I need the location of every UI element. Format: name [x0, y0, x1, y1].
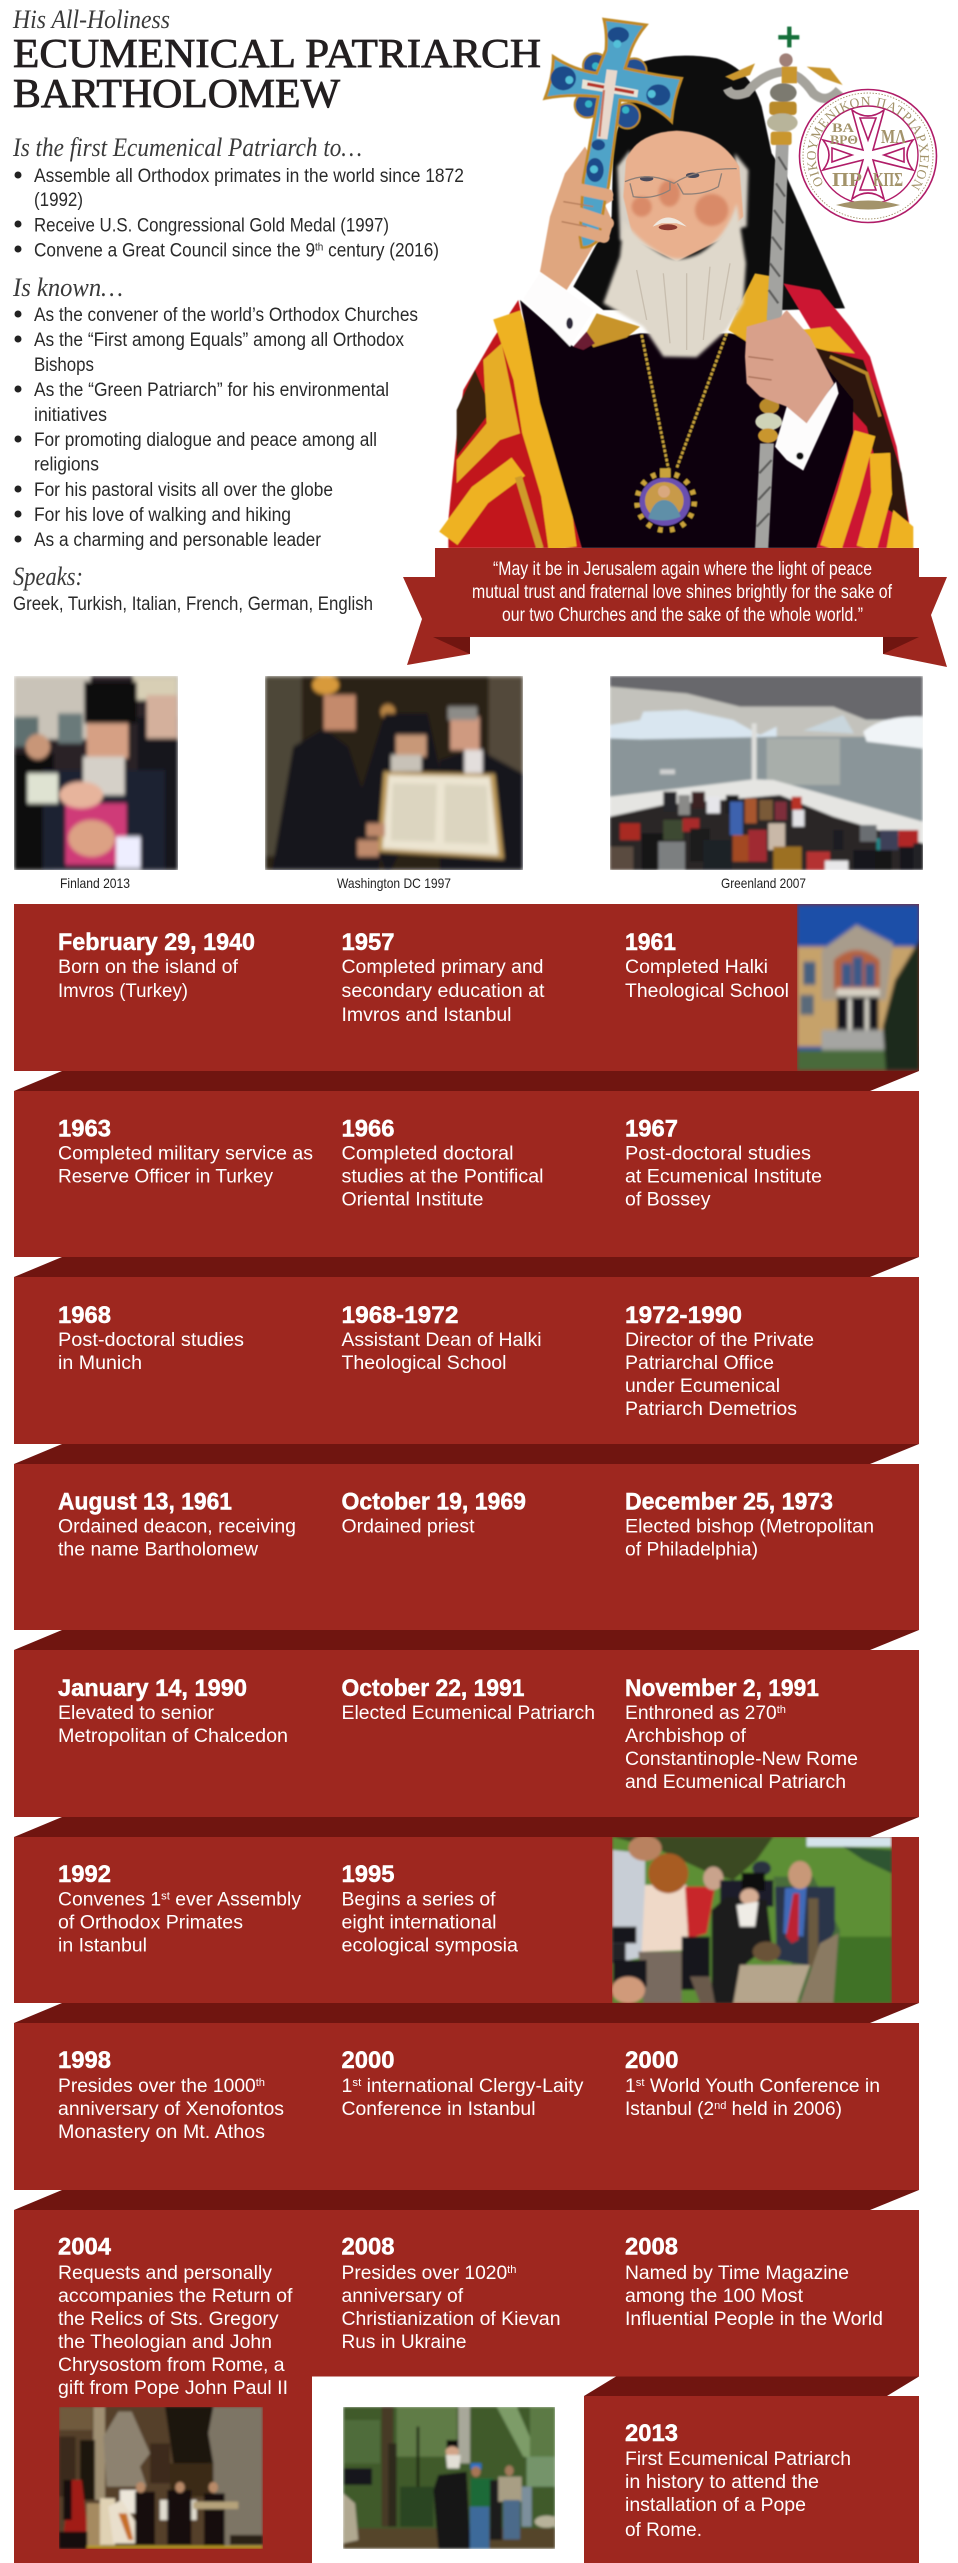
entry: 2004: Requests and personally	[58, 2263, 273, 2284]
timeline band 4	[14, 1464, 919, 1630]
right hand	[745, 310, 834, 423]
left main gold band	[507, 315, 563, 548]
list lines: As the “First among Equals” among all Orthodox	[34, 330, 404, 351]
entry: 2000 clergy-laity	[342, 2047, 584, 2120]
list lines: As the “Green Patriarch” for his environmental	[34, 380, 389, 401]
entry: 2008 Time Magazine: Influential People in the World	[625, 2309, 883, 2330]
entry: December 25, 1973: of Philadelphia)	[625, 1540, 758, 1560]
rosette jewels	[585, 62, 635, 114]
entry: 2004: gift from Pope John Paul II	[58, 2378, 288, 2399]
left tail	[403, 577, 470, 665]
band background	[14, 1464, 919, 1630]
timeline band 7	[14, 2023, 919, 2190]
entry: 2000 clergy-laity: 2000	[342, 2047, 394, 2074]
entry: 2008 Kievan Rus	[342, 2234, 560, 2353]
inner ring	[818, 106, 918, 204]
timeline band 5	[14, 1650, 919, 1817]
list lines: For promoting dialogue and peace among all	[34, 430, 377, 451]
entry: 1963: Reserve Officer in Turkey	[58, 1166, 273, 1188]
rosettes	[575, 53, 647, 129]
black cassock	[520, 300, 853, 548]
band background	[14, 2210, 919, 2563]
entry: 1995: eight international	[342, 1912, 496, 1934]
monogram letters: ΒΡΘ	[830, 132, 858, 147]
face	[623, 131, 743, 262]
band background	[14, 1277, 919, 1444]
entry: January 14, 1990	[58, 1675, 288, 1747]
list lines	[34, 166, 464, 262]
entry: 1998: th	[256, 2077, 265, 2089]
serpent heads	[725, 63, 843, 85]
entry: 2004: 2004	[58, 2234, 112, 2260]
entry: 1967: at Ecumenical Institute	[625, 1166, 822, 1188]
entry: 1957	[342, 929, 545, 1026]
entry: November 2, 1991: Constantinople-New Rome	[625, 1749, 858, 1770]
entry: 2000 clergy-laity: international Clergy-Laity	[361, 2076, 584, 2097]
list lines	[34, 305, 418, 551]
entry: 2000 youth conference: st	[636, 2077, 645, 2089]
entry: December 25, 1973	[625, 1488, 874, 1560]
entry: 2013: in history to attend the	[625, 2472, 819, 2493]
heading: Is the first Ecumenical Patriarch to…	[12, 132, 362, 162]
entry: August 13, 1961	[58, 1488, 296, 1560]
entry: November 2, 1991: November 2, 1991	[625, 1675, 819, 1702]
entry: January 14, 1990: Metropolitan of Chalcedon	[58, 1726, 288, 1747]
second ring	[803, 93, 933, 219]
wreath	[836, 200, 900, 210]
entry: August 13, 1961: August 13, 1961	[58, 1488, 232, 1516]
hat and veil	[573, 56, 845, 310]
beard strands	[637, 263, 730, 350]
monogram letters	[830, 120, 906, 191]
entry: 2000 youth conference: Istanbul (2	[625, 2099, 714, 2120]
list lines: th	[315, 242, 323, 254]
entry: 2013: 2013	[625, 2420, 678, 2447]
entry: 2000 clergy-laity: 1	[342, 2076, 352, 2097]
entry: 2008 Kievan Rus: Rus in Ukraine	[342, 2332, 466, 2353]
cross body	[545, 19, 682, 247]
eyebrow: His All-Holiness: His All-Holiness	[12, 4, 170, 34]
entry: 1992: st	[161, 1890, 170, 1902]
moustache	[653, 217, 687, 227]
entry: 1998: Presides over the 1000	[58, 2076, 253, 2097]
entry: 1966: Completed doctoral	[342, 1144, 514, 1164]
entry: December 25, 1973: December 25, 1973	[625, 1488, 833, 1516]
entry: February 29, 1940: February 29, 1940	[58, 929, 255, 956]
entry: October 22, 1991: October 22, 1991	[342, 1675, 524, 1702]
languages: Greek, Turkish, Italian, French, German, English	[13, 594, 373, 615]
bullets	[14, 310, 22, 542]
entry: 2008 Kievan Rus: Presides over 1020	[342, 2263, 505, 2284]
portrait: Patriarch holding cross and staff	[448, 19, 913, 548]
entry: 2013	[625, 2420, 851, 2541]
entry: 1995: Begins a series of	[342, 1890, 496, 1910]
entry: 1961	[625, 929, 789, 1002]
entry: August 13, 1961: the name Bartholomew	[58, 1540, 258, 1560]
entry: 2008 Kievan Rus: anniversary of	[342, 2286, 464, 2307]
entry: February 29, 1940	[58, 929, 255, 1002]
left embroidery	[457, 370, 492, 457]
entry: 1967: Post-doctoral studies	[625, 1144, 811, 1164]
entry: 1992	[58, 1861, 302, 1956]
entry: 1968-1972: 1968-1972	[342, 1302, 458, 1329]
entry: 1968: 1968	[58, 1302, 111, 1329]
right tail	[883, 577, 947, 667]
heading: Speaks:	[13, 561, 83, 591]
entry: January 14, 1990: Elevated to senior	[58, 1703, 215, 1724]
blessing hand and cross	[540, 19, 682, 290]
entry: 2008 Time Magazine: Named by Time Magazine	[625, 2263, 849, 2284]
title line 1: ECUMENICAL PATRIARCH	[13, 30, 541, 76]
entry: 2000 clergy-laity: Conference in Istanbul	[342, 2099, 536, 2120]
entry: 1957: 1957	[342, 929, 394, 956]
entry: 2004: accompanies the Return of	[58, 2286, 293, 2307]
entry: 1967: 1967	[625, 1116, 678, 1142]
list lines: religions	[34, 454, 99, 476]
entry: October 22, 1991: Elected Ecumenical Patriarch	[342, 1703, 595, 1724]
entry: 1961: Completed Halki	[625, 957, 768, 978]
timeline band 6	[14, 1836, 919, 2003]
entry: 1966	[342, 1116, 544, 1210]
entry: 1967	[625, 1116, 822, 1210]
mouth	[659, 224, 677, 230]
entry: 2000 youth conference: 2000	[625, 2047, 678, 2074]
entry: 1963: 1963	[58, 1116, 111, 1142]
knobs	[767, 53, 798, 145]
list lines: As a charming and personable leader	[34, 530, 322, 551]
seal of the Ecumenical Patriarchate	[798, 88, 938, 224]
entry: November 2, 1991: Enthroned as 270	[625, 1703, 775, 1724]
staff knobs	[759, 398, 779, 414]
entry: 2013: First Ecumenical Patriarch	[625, 2449, 851, 2470]
shaft	[767, 145, 789, 327]
banner body	[435, 548, 919, 637]
gold yoke left	[585, 313, 640, 347]
entry: 1957: Completed primary and	[342, 957, 544, 978]
entry: February 29, 1940: Imvros (Turkey)	[58, 981, 188, 1002]
entry: 2013: of Rome.	[625, 2520, 702, 2541]
monogram letters: ΒΑ	[832, 120, 855, 135]
entry: 1972-1990: Patriarchal Office	[625, 1353, 774, 1374]
fingers	[572, 188, 607, 237]
photo: Halki Theological School	[797, 904, 919, 1071]
captions	[60, 875, 806, 891]
right cuff	[775, 382, 839, 471]
photo: Finland 2013	[14, 676, 178, 870]
crucifix bar	[582, 79, 638, 97]
entry: 2004: the Relics of Sts. Gregory	[58, 2309, 279, 2330]
list lines: Bishops	[34, 355, 94, 376]
timeline folds	[14, 1071, 919, 2396]
entry: 1966: 1966	[342, 1116, 394, 1142]
entry: October 19, 1969: Ordained priest	[342, 1516, 475, 1538]
entry: 1992: ever Assembly	[170, 1890, 302, 1910]
left shirt cuff	[523, 273, 594, 347]
entry: 1998: Monastery on Mt. Athos	[58, 2122, 265, 2143]
list lines: century (2016)	[323, 240, 439, 262]
entry: 1992: in Istanbul	[58, 1936, 147, 1956]
bullets	[14, 172, 22, 252]
entry: 2008 Kievan Rus: th	[507, 2264, 516, 2276]
entry: 1966: studies at the Pontifical	[342, 1166, 544, 1188]
cross jewels	[565, 40, 656, 173]
chain	[642, 333, 727, 468]
entry: 2008 Time Magazine: among the 100 Most	[625, 2286, 804, 2307]
left cufflink	[566, 318, 573, 329]
palm	[540, 147, 613, 290]
entry: 2000 clergy-laity: st	[352, 2077, 361, 2089]
text block: first Ecumenical Patriarch to	[12, 132, 464, 262]
finger creases	[562, 202, 593, 227]
entry: 1966: Oriental Institute	[342, 1190, 484, 1210]
entry: 2013: installation of a Pope	[625, 2495, 806, 2516]
entry: August 13, 1961: Ordained deacon, receiving	[58, 1516, 296, 1538]
panel: 2013 background	[584, 2396, 919, 2563]
list lines: initiatives	[34, 405, 107, 426]
lower shaft	[755, 443, 774, 548]
list lines: For his pastoral visits all over the globe	[34, 480, 333, 501]
entry: 2008 Kievan Rus: 2008	[342, 2234, 394, 2260]
side hair	[617, 150, 748, 243]
timeline band 8	[14, 2210, 919, 2563]
entry: 1995	[342, 1861, 518, 1956]
entry: 2000 youth conference: nd	[714, 2100, 726, 2112]
band background	[14, 2023, 919, 2190]
entry: November 2, 1991: th	[777, 1704, 786, 1716]
entry: 1963: Completed military service as	[58, 1144, 313, 1164]
entry: 1992: Convenes 1	[58, 1890, 159, 1910]
entry: 2008 Time Magazine	[625, 2234, 883, 2330]
list lines: Receive U.S. Congressional Gold Medal (1997)	[34, 216, 389, 236]
pendant	[637, 468, 694, 530]
photo: Washington DC 1997	[265, 676, 523, 870]
monogram letters: ΜΛ	[881, 126, 906, 148]
diagonal gold band	[448, 467, 518, 538]
timeline band 2	[14, 1091, 919, 1257]
tail folds	[433, 637, 919, 654]
monogram letters: ΠΡ	[832, 169, 862, 191]
quote text	[472, 558, 892, 626]
text block: is known	[12, 272, 418, 551]
band background	[14, 1091, 919, 1257]
entry: 1967: of Bossey	[625, 1190, 711, 1210]
entry: 1968-1972: Assistant Dean of Halki	[342, 1330, 542, 1351]
entry: November 2, 1991: and Ecumenical Patriarch	[625, 1772, 846, 1793]
heading: Is known…	[12, 272, 123, 302]
list lines: As the convener of the world’s Orthodox Churches	[34, 305, 418, 326]
entry: November 2, 1991: Archbishop of	[625, 1726, 747, 1747]
caption: Finland 2013: Finland 2013	[60, 875, 130, 891]
beard	[603, 203, 746, 357]
list lines: Assemble all Orthodox primates in the world since 1872	[34, 166, 464, 187]
entry: 1995: 1995	[342, 1861, 394, 1888]
gold yoke right	[728, 273, 773, 342]
band background	[14, 904, 919, 1071]
robes	[448, 273, 913, 548]
entry: December 25, 1973: Elected bishop (Metropolitan	[625, 1516, 874, 1538]
right mantle base	[783, 283, 913, 548]
band background	[14, 1837, 919, 2003]
caption: Greenland 2007: Greenland 2007	[721, 875, 806, 891]
entry: 2004: the Theologian and John	[58, 2332, 272, 2353]
glasses	[625, 169, 737, 197]
maroon under cuff	[573, 332, 595, 350]
right gold bands	[831, 433, 865, 548]
list lines: Convene a Great Council since the 9	[34, 240, 345, 262]
entry: 1968-1972: Theological School	[342, 1353, 506, 1374]
face shading	[632, 180, 728, 226]
entry: February 29, 1940: Born on the island of	[58, 957, 239, 978]
photo: Greenland 2007	[610, 676, 923, 870]
entry: 1992: of Orthodox Primates	[58, 1912, 243, 1934]
timeline band 3	[14, 1277, 919, 1444]
entry: October 22, 1991	[342, 1675, 595, 1724]
right gold collar	[800, 327, 855, 353]
entry: 2004	[58, 2234, 293, 2399]
left mantle base	[448, 300, 582, 548]
serpent staff upper	[725, 27, 843, 327]
entry: 1961: Theological School	[625, 981, 789, 1002]
crucifix upright	[597, 69, 617, 139]
quote text: “May it be in Jerusalem again where the light of peace	[493, 558, 872, 580]
ribbon quote banner	[403, 548, 947, 667]
band background	[14, 1650, 919, 1817]
entry: 1957: secondary education at	[342, 981, 545, 1002]
thin gold strip	[518, 477, 540, 548]
entry: 1972-1990: Director of the Private	[625, 1330, 814, 1351]
entry: 1972-1990: Patriarch Demetrios	[625, 1399, 797, 1420]
entry: November 2, 1991	[625, 1675, 858, 1793]
header: title block	[12, 4, 541, 116]
lower staff and right hand	[745, 310, 839, 548]
entry: 1968: in Munich	[58, 1353, 142, 1374]
entry: January 14, 1990: January 14, 1990	[58, 1675, 247, 1702]
timeline band 1	[14, 904, 919, 1071]
green finial	[778, 27, 799, 47]
entry: 2000 youth conference: 1	[625, 2076, 636, 2097]
entry: 1992: 1992	[58, 1861, 111, 1888]
entry: 1957: Imvros and Istanbul	[342, 1005, 512, 1026]
entry: 2004: Chrysostom from Rome, a	[58, 2355, 285, 2376]
caption: Washington DC 1997: Washington DC 1997	[337, 875, 451, 891]
monogram letters: ΚΠΣ	[873, 169, 903, 191]
outer ring	[800, 90, 936, 222]
entry: 1972-1990	[625, 1302, 814, 1420]
left gold panel	[457, 343, 520, 483]
entry: 2000 youth conference: held in 2006)	[726, 2099, 842, 2120]
quote text: our two Churches and the sake of the whole world.”	[502, 604, 863, 626]
entry: 2008 Kievan Rus: Christianization of Kievan	[342, 2309, 560, 2330]
entry: October 19, 1969: October 19, 1969	[342, 1488, 526, 1516]
entry: 1972-1990: under Ecumenical	[625, 1376, 780, 1397]
photo: rainforest walk	[343, 2407, 559, 2549]
entry: 1998: anniversary of Xenofontos	[58, 2099, 284, 2120]
entry: 1961: 1961	[625, 929, 676, 956]
entry: 1998: 1998	[58, 2047, 111, 2074]
entry: 1968: Post-doctoral studies	[58, 1330, 244, 1351]
photo: St. Peter's Basilica ceremony	[59, 2407, 263, 2549]
eyes	[640, 173, 699, 181]
right embroidery	[813, 347, 908, 522]
entry: October 19, 1969	[342, 1488, 526, 1538]
inner cross	[823, 110, 913, 199]
entry: 1972-1990: 1972-1990	[625, 1302, 742, 1329]
entry: 2000 youth conference	[625, 2047, 880, 2120]
serpents	[727, 72, 839, 98]
list lines: For his love of walking and hiking	[34, 505, 291, 526]
title line 2: BARTHOLOMEW	[13, 70, 340, 116]
photo: releasing a bird	[612, 1836, 892, 2003]
list lines: (1992)	[34, 190, 83, 211]
entry: 1995: ecological symposia	[342, 1936, 518, 1956]
text block: speaks	[13, 561, 373, 615]
enamel swirls	[551, 27, 670, 182]
entry: 2000 youth conference: World Youth Conference in	[645, 2076, 880, 2097]
ring inscription: ΟΙΚΟΥΜΕΝΙΚΟΝ ΠΑΤΡΙΑΡΧΕΙΟΝ	[807, 96, 929, 191]
entry: 1963	[58, 1116, 313, 1188]
entry: 1968-1972	[342, 1302, 542, 1374]
entry: 1998	[58, 2047, 284, 2143]
entry: 1968	[58, 1302, 244, 1374]
head	[603, 131, 748, 357]
entry: 2008 Time Magazine: 2008	[625, 2234, 678, 2260]
